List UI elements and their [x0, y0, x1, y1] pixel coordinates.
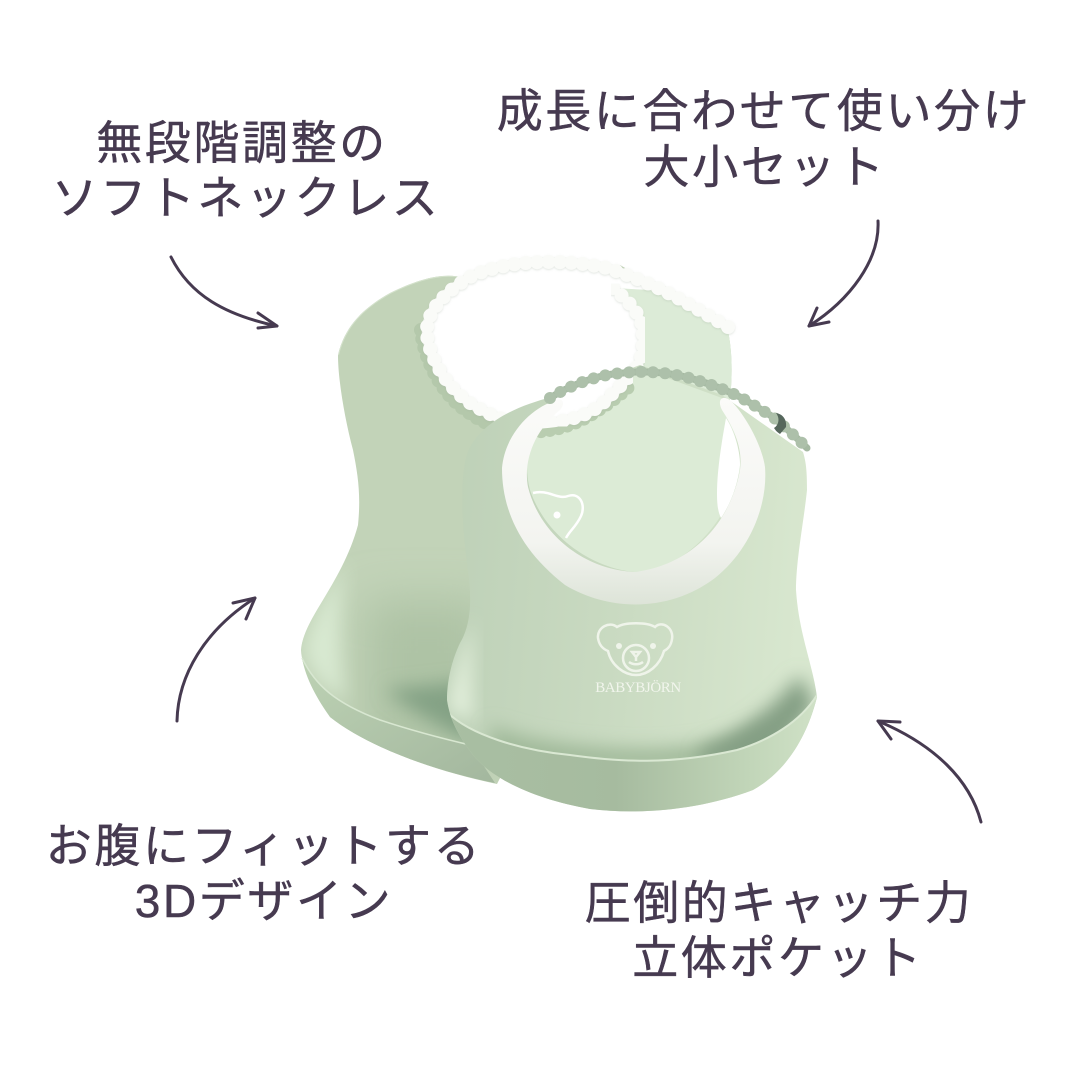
- small bib: [440, 365, 830, 820]
- white neck ring: [502, 398, 765, 604]
- white neck beads: [427, 262, 728, 425]
- lip highlight: [447, 695, 817, 761]
- large bib lip highlight: [302, 658, 470, 745]
- large bib body: [301, 265, 732, 784]
- white beads seen through neck: [535, 378, 628, 424]
- white gap inside small neck: [717, 418, 740, 518]
- pocket shadow right: [700, 675, 815, 765]
- sage cord: [550, 372, 807, 448]
- callout: size set top right: [497, 85, 1031, 193]
- callout: fit bottom left: [46, 820, 482, 927]
- white hole seen through small neck: [545, 367, 641, 426]
- left highlight: [304, 560, 345, 700]
- large bib shading: [304, 265, 735, 760]
- sage neck beads: [550, 372, 807, 448]
- scallop seen through neck: [532, 384, 632, 432]
- heading line one: 成長に合わせて使い分け: [497, 85, 1031, 137]
- bear logo: [598, 623, 672, 675]
- bear mark behind neck: [533, 492, 583, 538]
- heading line one: お腹にフィットする: [46, 820, 482, 872]
- large bib scallop edge: [421, 330, 556, 436]
- heading line two: 3Dデザイン: [135, 875, 393, 927]
- arrow: to small bib: [809, 221, 878, 326]
- heading line two: 大小セット: [644, 141, 886, 193]
- arrow: to pocket: [878, 721, 981, 822]
- white neck beads core: [427, 262, 728, 425]
- small bib shading: [447, 638, 817, 812]
- upper right light area: [623, 288, 732, 400]
- callout: neck top left: [52, 117, 440, 224]
- pocket lip: [452, 698, 817, 812]
- heading line one: 圧倒的キャッチ力: [585, 877, 973, 929]
- large bib pocket lip: [302, 658, 495, 783]
- heading line two: 立体ポケット: [632, 932, 924, 984]
- left highlight: [448, 620, 475, 720]
- small bib neck opening: [527, 368, 740, 572]
- pocket shadow: [388, 675, 464, 742]
- white beads core seen through neck: [535, 378, 628, 424]
- inner neck beads: [613, 288, 643, 378]
- arrow: to neck: [171, 257, 277, 328]
- body lower tint: [365, 600, 490, 760]
- arrow: to belly: [177, 598, 255, 721]
- upper edge light: [338, 276, 465, 355]
- large bib: [301, 262, 735, 784]
- callout: pocket bottom right: [585, 877, 973, 984]
- heading line two: ソフトネックレス: [52, 172, 440, 224]
- neck clasp: [774, 413, 786, 434]
- small bib body: [447, 365, 817, 811]
- large bib neck opening: [427, 263, 650, 430]
- heading line one: 無段階調整の: [96, 117, 388, 169]
- brand name: BABYBJÖRN: [595, 679, 681, 696]
- pocket shadow centre: [486, 724, 742, 760]
